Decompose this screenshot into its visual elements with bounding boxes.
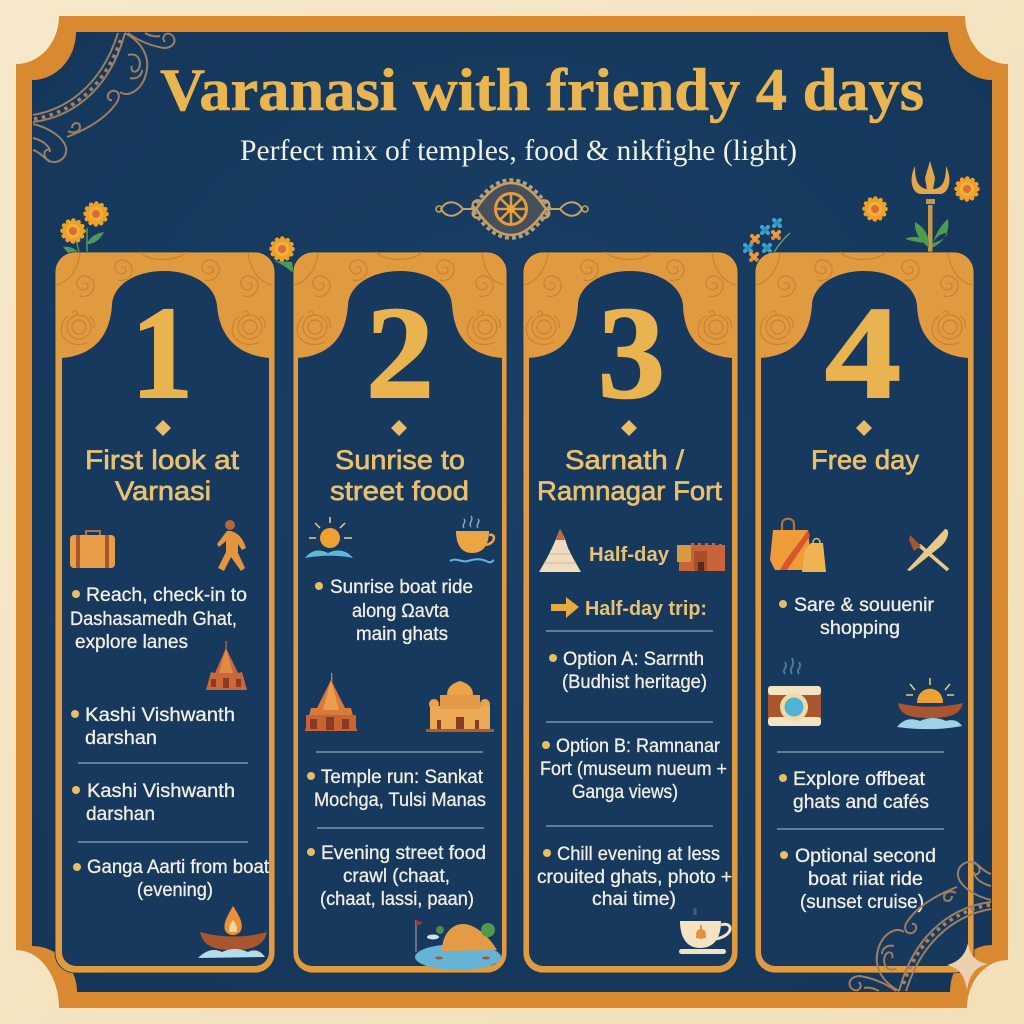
header pattern day 2: [294, 252, 504, 345]
bullet: sunrise boat: Sunrise boat ride: [330, 576, 473, 598]
bullet: option A: Option A: Sarrnth: [563, 648, 704, 670]
bullet: kashi 2: darshan: [86, 803, 155, 825]
header pattern day 1: [56, 252, 272, 345]
bullet: reach: Dashasamedh Ghat,: [70, 608, 237, 630]
arch inner day 1: [62, 271, 269, 966]
icon: coffee cup: [450, 516, 494, 562]
ornament: bottom-right mandala: [849, 862, 991, 991]
bullet: sunrise boat: main ghats: [356, 623, 448, 645]
bullet: offbeat: [779, 768, 929, 813]
bullet: offbeat: Explore offbeat: [793, 768, 926, 790]
bullet: chill evening: [537, 843, 732, 910]
icon: stupa: [539, 529, 581, 572]
icon: marigold far right: [956, 178, 978, 200]
bullet: second boat: boat riiat ride: [808, 868, 923, 890]
header pattern day 3: [524, 252, 736, 345]
icon: marigold between panels: [272, 238, 294, 274]
diamond: [621, 420, 637, 436]
number 2: 2: [366, 279, 434, 426]
icon: sparkle: [947, 943, 988, 990]
bullet: kashi 1: [71, 704, 235, 749]
bullet: souvenir: shopping: [820, 617, 900, 639]
number 1: 1: [131, 279, 193, 426]
bullet: option B: Option B: Ramnanar: [556, 735, 720, 757]
center ornament: [436, 180, 588, 238]
icon: sun boat: [897, 678, 963, 729]
icon: temple: [305, 673, 357, 731]
bullet: chill evening: chai time): [592, 888, 676, 910]
bullet: second boat: Optional second: [795, 845, 936, 867]
bullet: option B: Ganga views): [572, 781, 678, 803]
heading day 4: Free day: [811, 445, 919, 475]
heading day 3: [537, 445, 722, 506]
heading day 3: Sarnath /: [565, 445, 685, 475]
panel frame day 3: [523, 252, 738, 973]
number 4: 4: [825, 279, 901, 426]
bullet: chill evening: Chill evening at less: [557, 843, 720, 865]
panel: day 3: [523, 252, 738, 973]
icon: palace: [426, 681, 494, 732]
heading day 3: Ramnagar Fort: [537, 476, 722, 506]
bullet: reach: [70, 584, 247, 653]
heading day 2: [330, 445, 469, 506]
half-day label: Half-day: [589, 544, 670, 566]
icon: camera: [768, 658, 821, 726]
panel: day 4: [755, 252, 974, 973]
bullet: option A: (Budhist heritage): [562, 671, 707, 693]
icon: temple small: [206, 641, 247, 690]
icon: island: [415, 920, 501, 970]
icon: fork and knife: [907, 529, 948, 571]
bullet: temple run: Temple run: Sankat: [321, 766, 484, 788]
subtitle: Perfect mix of temples, food & nikfighe (light): [240, 134, 797, 167]
icon: trident: [905, 161, 949, 254]
bullet: street food: Evening street food: [321, 842, 486, 864]
panel frame day 4: [755, 252, 974, 973]
icon: lamp boat: [198, 906, 267, 958]
bullet: second boat: [780, 845, 936, 913]
bullet: sunrise boat: along Ωavta: [352, 600, 449, 622]
icon: shopping bags: [770, 519, 826, 572]
bullet: ganga aarti: (evening): [137, 879, 213, 901]
panel: day 2: [293, 252, 507, 973]
icon: blue flowers: [743, 218, 790, 262]
panel: day 1: [55, 252, 275, 973]
icon: marigolds left: [62, 204, 106, 253]
diamond: [391, 420, 407, 436]
bullet: ganga aarti: [73, 856, 270, 901]
bullet: chill evening: crouited ghats, photo +: [537, 866, 732, 888]
heading day 2: Sunrise to: [335, 445, 465, 475]
bullet: kashi 2: [72, 780, 235, 825]
bullet: street food: [307, 842, 486, 910]
icon: marigold right: [864, 198, 886, 220]
heading day 1: [85, 445, 240, 506]
diamond: [155, 420, 171, 436]
icon: chai cup: [679, 908, 730, 954]
half-day trip row: Half-day trip:: [585, 598, 707, 620]
title: Varanasi with friendy 4 days: [160, 57, 924, 123]
bullet: street food: (chaat, lassi, paan): [320, 888, 474, 910]
number 3: 3: [598, 279, 665, 426]
bullet: kashi 2: Kashi Vishwanth: [87, 780, 235, 802]
bullet: option A: [549, 648, 707, 693]
panel frame day 1: [55, 252, 275, 973]
diamond: [856, 420, 872, 436]
ornament: top-left mandala: [33, 33, 175, 162]
bullet: reach: Reach, check-in to: [86, 584, 247, 606]
bullet: temple run: Mochga, Tulsi Manas: [314, 789, 486, 811]
bullet: second boat: (sunset cruise): [800, 891, 924, 913]
arch inner day 2: [298, 271, 502, 966]
bullet: option B: [540, 735, 727, 803]
heading day 1: Varnasi: [115, 476, 211, 506]
bullet: reach: explore lanes: [75, 631, 188, 653]
bullet: souvenir: Sare & souuenir: [794, 594, 934, 616]
arch inner day 3: [529, 271, 732, 966]
bullet: option B: Fort (museum nueum +: [540, 758, 727, 780]
bullet: kashi 1: darshan: [85, 727, 157, 749]
icon: suitcase: [70, 531, 115, 568]
bullet: temple run: [307, 766, 486, 811]
arch inner day 4: [761, 271, 968, 966]
bullet: sunrise boat: [315, 576, 473, 645]
icon: fort: [677, 543, 725, 571]
icon: walker: [217, 520, 246, 571]
icon: sunrise: [305, 517, 353, 558]
heading day 1: First look at: [85, 445, 240, 475]
bullet: offbeat: ghats and cafés: [793, 791, 929, 813]
panel frame day 2: [293, 252, 507, 973]
heading day 2: street food: [330, 476, 469, 506]
bullet: souvenir: [779, 594, 934, 639]
bullet: ganga aarti: Ganga Aarti from boat: [87, 856, 270, 878]
bullet: street food: crawl (chaat,: [343, 865, 450, 887]
bullet: kashi 1: Kashi Vishwanth: [85, 704, 235, 726]
header pattern day 4: [756, 252, 972, 345]
